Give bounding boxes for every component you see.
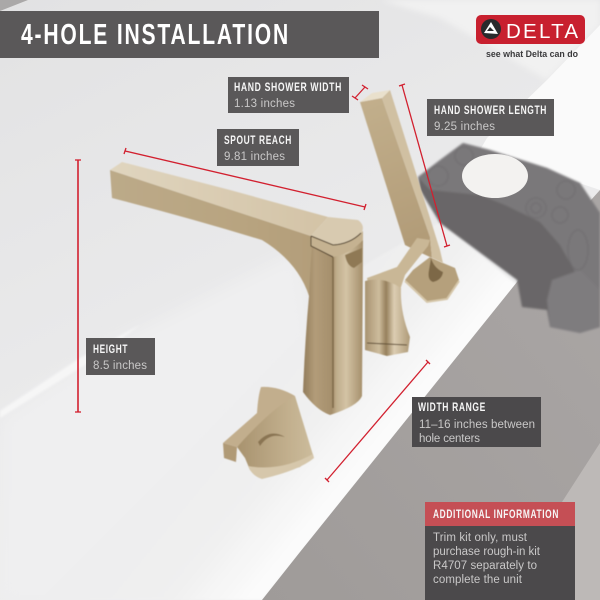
spout cap seam [311,233,361,257]
towel: embossed roses [428,147,588,270]
background: gray floor [262,190,600,600]
panel text: complete the unit [433,574,523,586]
soap [462,154,528,198]
label: width range: hole centers [419,433,480,445]
logo wordmark: DELTA [506,20,578,43]
background: upper right deck [480,25,600,190]
Delta logo [476,15,585,59]
label: hand shower length: HAND SHOWER LENGTH [434,103,547,117]
base highlight rim [405,281,459,302]
label: hand shower width: 1.13 inches [234,98,295,110]
body ridge line [332,257,334,408]
right handle base seam [367,343,407,345]
towel: faded lower fold [547,270,600,333]
label: spout reach: 9.81 inches [224,151,285,163]
hand shower [360,90,443,263]
logo tagline: see what Delta can do [486,49,578,59]
right handle blade [367,238,430,290]
label: hand shower length: 9.25 inches [434,121,495,133]
towel: folded top [418,143,600,315]
hand shower right face [382,90,443,263]
panel text: Trim kit only, must [433,532,528,544]
background: top right lighter wall [380,0,600,80]
logo emblem [481,19,501,39]
front handle arch [258,433,285,446]
label: height: 8.5 inches [93,360,147,372]
label: hand shower length [427,99,554,136]
background: light streak on tub wall [0,325,140,418]
label: spout reach [217,129,299,166]
label: hand shower width: HAND SHOWER WIDTH [234,80,342,94]
panel: additional information [425,502,575,600]
label: spout reach: SPOUT REACH [224,133,292,147]
background: top-left tub rim shadow [0,0,28,11]
right handle [365,238,430,356]
faucet body [303,240,363,415]
front left handle [223,387,314,479]
label: hand shower width [228,77,349,113]
label: height: HEIGHT [93,342,128,356]
background: white deck [40,222,517,600]
panel header [425,502,575,526]
panel text: R4707 separately to [433,560,537,572]
base neck shadow [428,258,443,282]
measure line: hand shower length [399,84,450,247]
hand shower top [360,90,390,102]
panel text [433,532,541,586]
background: light floor stripe [497,443,600,600]
spout top face [110,162,328,236]
panel body [425,526,575,600]
background: lower basin [0,250,340,600]
title banner [0,11,379,58]
spout cap side [311,231,363,257]
aerator [345,248,362,268]
label: width range: 11–16 inches between [419,419,535,431]
spout and faucet body [110,162,363,415]
front handle body [237,396,313,478]
measure line: spout reach [124,148,366,210]
label: width range [412,397,541,447]
hand shower base [405,257,459,302]
front handle lever [223,387,295,447]
measure line: width range [325,360,430,482]
panel text: purchase rough-in kit [433,546,541,558]
label: height [86,338,155,375]
towel [418,143,600,333]
spout cap top [311,217,363,245]
spout front face [110,170,333,300]
right handle body [365,280,410,356]
title: 4-HOLE INSTALLATION [21,19,290,51]
hand shower left face [360,98,432,258]
measure line: height [75,160,81,412]
front handle lever tip [223,443,237,462]
label: width range: WIDTH RANGE [418,400,486,414]
measure line: hand shower width [352,85,368,100]
front handle collar [248,454,314,479]
